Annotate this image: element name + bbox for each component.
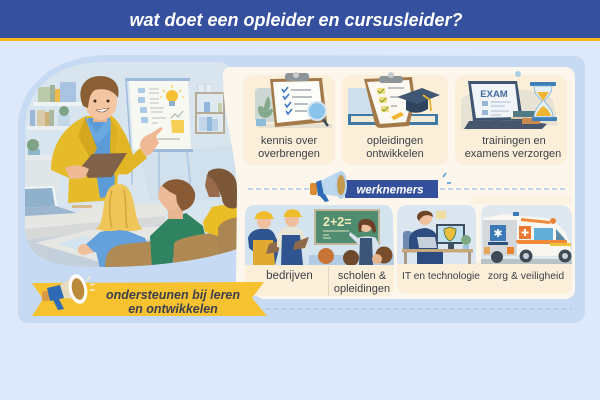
wall lower tint [140, 145, 235, 200]
icon: megaphone [310, 171, 451, 202]
icon: megaphone [42, 272, 95, 310]
card: trainingen en examens verzorgen [455, 71, 567, 165]
ribbon callout [32, 272, 267, 316]
left hand [65, 165, 89, 179]
label: IT en technologie [402, 271, 480, 282]
card: bedrijven and scholen [245, 205, 395, 296]
ribbon text: ondersteunen bij leren [106, 288, 240, 302]
flipchart [125, 78, 193, 200]
werknemers heading [310, 171, 451, 202]
icon: exam laptop and hourglass: EXAM [480, 89, 508, 100]
desks [25, 204, 168, 270]
neck [93, 118, 107, 122]
icon: clipboard and graduation cap [348, 72, 440, 128]
icon: ambulance: ✱ [493, 228, 503, 240]
teacher [51, 76, 163, 203]
clipboard [81, 153, 127, 178]
student: yellow shirt [203, 168, 239, 255]
icon: clipboard and magnifier [255, 72, 332, 128]
student: green shirt [150, 179, 219, 268]
card: trainingen en examens verzorgen: examens verzorgen [465, 148, 561, 160]
sector strip background [470, 195, 573, 204]
laptop [25, 186, 77, 219]
chair [218, 217, 237, 254]
card: kennis over overbrengen: overbrengen [258, 148, 320, 160]
shirt [88, 118, 115, 198]
label: bedrijven [266, 270, 313, 282]
label: opleidingen [367, 135, 423, 147]
right sleeve [120, 126, 147, 174]
face [86, 89, 117, 120]
icon: IT worker at computer [402, 211, 473, 265]
hourglass [530, 82, 556, 86]
card: opleidingen ontwikkelen: ontwikkelen [366, 148, 424, 160]
card: opleidingen ontwikkelen [342, 72, 448, 165]
icon: chalkboard with teacher and pupils [309, 209, 394, 266]
pointing hand [140, 127, 163, 156]
hair [80, 76, 119, 108]
label [334, 270, 390, 295]
werknemers heading: werknemers [356, 184, 424, 196]
chair [105, 241, 161, 268]
label: scholen & [338, 270, 387, 282]
bookshelf [25, 82, 83, 160]
title banner [0, 0, 600, 41]
label: zorg & veiligheid [488, 271, 564, 282]
wall shelf [196, 84, 224, 133]
label: opleidingen [334, 283, 390, 295]
icon: chalkboard with teacher and pupils: 2+2= [323, 215, 352, 229]
jacket body [51, 116, 132, 203]
outer panel [18, 55, 585, 323]
card: kennis over overbrengen [243, 72, 335, 165]
student: blonde [78, 184, 161, 268]
label: trainingen en [482, 135, 546, 147]
ribbon callout: en ontwikkelen [128, 302, 218, 316]
title: wat doet een opleider en cursusleider? [129, 10, 463, 30]
card: IT and zorg [397, 205, 573, 294]
classroom scene [25, 62, 240, 270]
label: kennis over [261, 135, 317, 147]
chair [173, 233, 219, 265]
icon: construction workers [248, 209, 309, 265]
lapel [78, 118, 97, 160]
cream panel [223, 67, 575, 299]
